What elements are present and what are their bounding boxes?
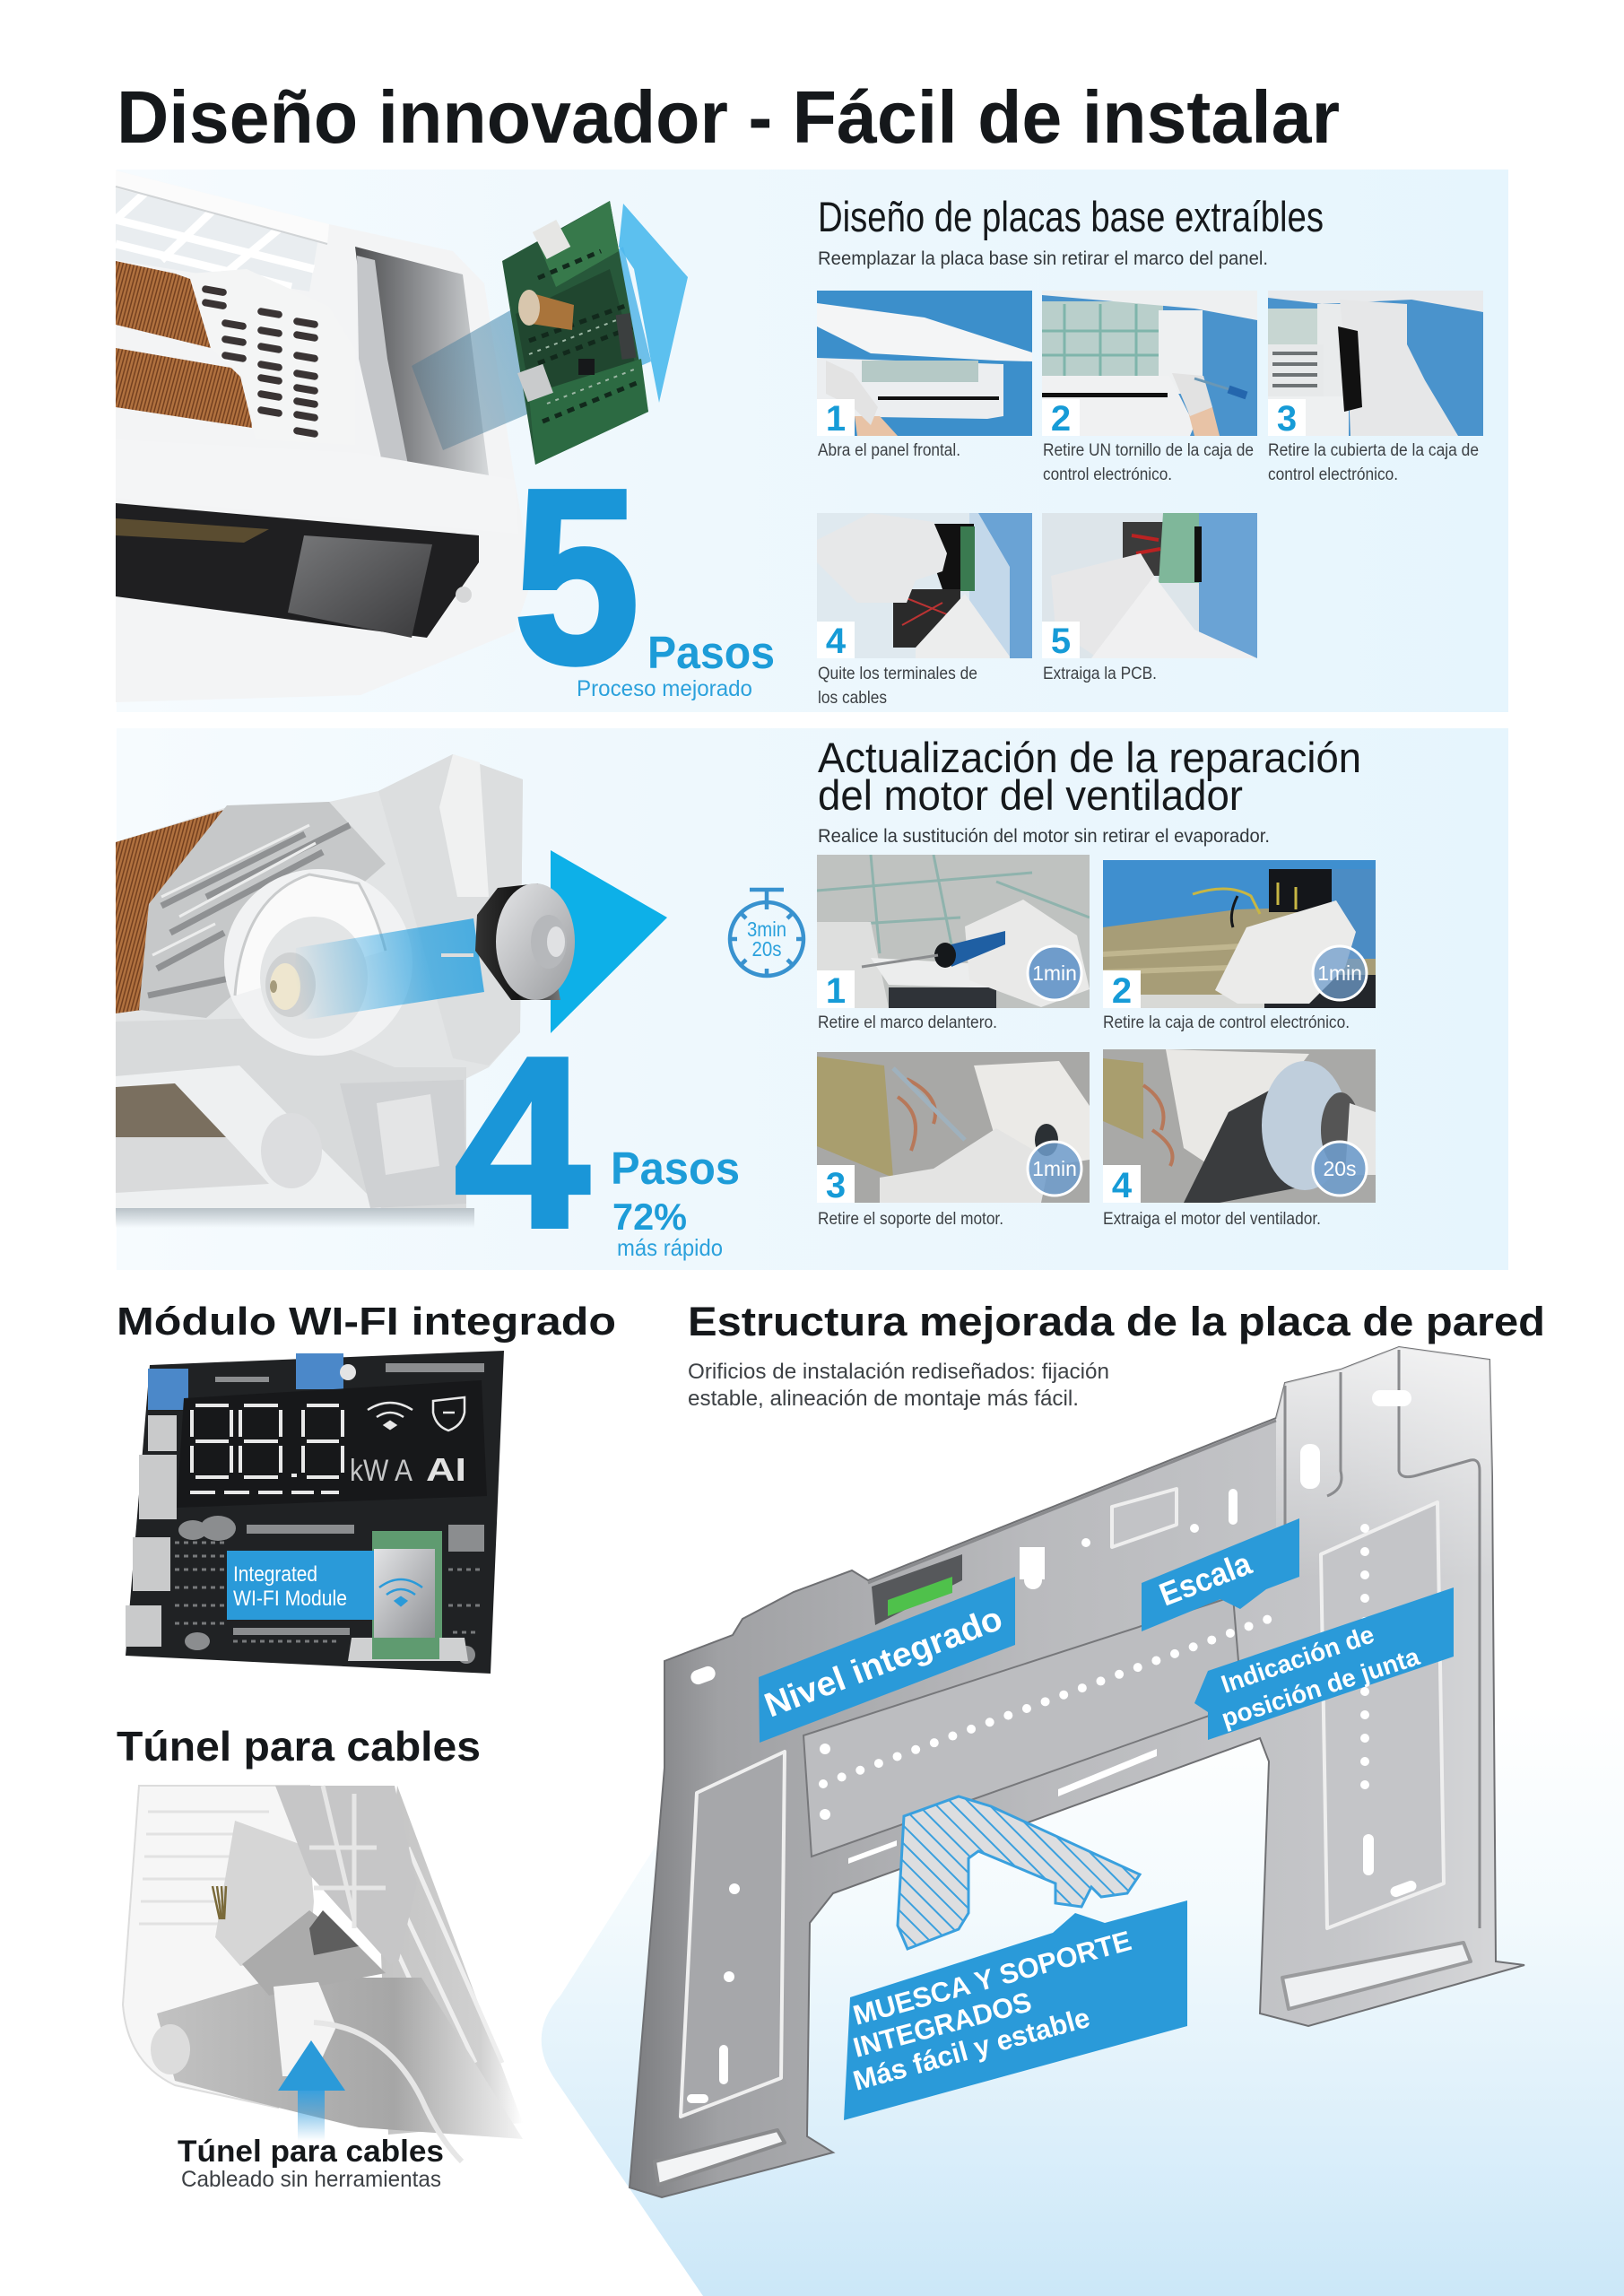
lower white band [116,439,518,534]
display units: kW A [350,1454,413,1488]
white tunnel block [274,1982,336,2076]
floor shadow [116,1208,474,1228]
copper coil [116,809,227,1013]
left recess [681,1752,785,2117]
step 4 photo [817,513,1032,661]
board traces [175,1543,484,1641]
tray inner shadow [116,1083,226,1137]
label: notch and support: INTEGRADOS [850,1986,1035,2064]
main column [275,1786,417,1964]
step 1 photo [817,291,1032,439]
pasos label: Pasos [611,1143,740,1194]
label: joint position: posición de junta [1218,1642,1423,1733]
blue connector top [296,1353,343,1389]
panel: fan motor repair [116,728,1508,1278]
left white connectors [126,1415,177,1647]
illustration: fan motor assembly [116,754,575,1228]
motor step 4 photo: 4 [1112,1166,1133,1205]
circuit board [126,1351,504,1674]
integrated notch bracket [898,1796,1140,1949]
motor step captions: Retire el marco delantero. [818,1013,997,1032]
centre duct [242,1910,386,1996]
heading: Actualización de la reparación [818,734,1361,781]
motor step 2 photo [1103,860,1376,1011]
fan shroud arc [235,874,386,996]
capacitor [518,290,574,330]
step captions: Extraiga la PCB. [1043,665,1157,683]
assembly silhouette [116,754,523,1208]
72 percent: 72% [612,1196,687,1238]
step 1 photo: 1 [826,399,846,439]
board [126,1351,504,1674]
step captions: Quite los terminales de [818,665,977,683]
module base [348,1638,468,1661]
icon: shield [433,1397,465,1431]
metal wall plate [630,1347,1524,2197]
gearbox drum [261,1113,322,1188]
motor step 2 photo: 2 [1112,971,1132,1011]
dark opening [116,503,479,638]
icon: module wifi [379,1579,422,1605]
motor step 4 photo: 20s [1323,1157,1357,1180]
lower tray [116,1065,381,1208]
section: integrated wi-fi module [117,1300,616,1674]
step 5 photo [1042,513,1257,661]
motor step captions: Retire el soporte del motor. [818,1210,1003,1229]
dark channel [309,1910,359,1955]
step 3 photo [1268,291,1483,439]
right foot slot [1282,1943,1471,2009]
step 2 photo [1042,291,1257,439]
module label: WI-FI Module [233,1587,347,1611]
screw [456,587,472,603]
illustration: unit with cable tunnel [123,1786,523,2161]
step captions: control electrónico. [1043,465,1172,484]
icon: stopwatch: 3min [747,918,786,941]
coloured wires [213,1886,226,1919]
top right fade [1276,1347,1492,1578]
step 3 photo: 3 [1277,399,1297,439]
heading: Módulo WI-FI integrado [117,1300,616,1344]
copper coil upper [116,261,211,348]
motor step 1 photo: 1 [826,971,846,1011]
caption subtitle: Cableado sin herramientas [181,2167,441,2192]
label: notch and support [844,1900,1187,2120]
inner grey box [288,535,432,638]
panel: removable PCB design [116,170,1508,715]
improved process label: Proceso mejorado [577,676,752,701]
pipes [139,802,386,1018]
motor [441,883,575,1000]
motor step 2 photo: 1min [1317,961,1362,985]
step captions [818,441,1479,708]
copper coil lower [116,348,252,428]
hole row [823,1619,1269,1784]
illustration: indoor unit with PCB [116,170,688,702]
oblong emboss [1112,1489,1177,1547]
icon: stopwatch: 20s [751,937,782,961]
translucent grey block [215,1821,314,1966]
bearing [265,952,316,1017]
arrow head [551,850,667,1033]
side wall [378,754,523,1065]
bracket shade [377,1094,439,1175]
vertical hole column [1360,1528,1369,1787]
top grille [116,170,329,291]
step captions: control electrónico. [1268,465,1398,484]
base block [116,1018,466,1208]
heading: Diseño de placas base extraíbles [818,193,1324,240]
arrow shaft [298,2091,325,2141]
caption title: Túnel para cables [178,2135,444,2169]
plate outline [630,1347,1524,2197]
section: wall plate [630,1299,1545,2197]
motor step captions: Retire la caja de control electrónico. [1103,1013,1350,1032]
right recess [1321,1502,1444,1928]
label: integrated level: Nivel integrado [760,1600,1008,1725]
arrow shaft [293,918,484,1022]
motor step captions [818,1013,1350,1229]
display ai logo: AI [426,1451,466,1488]
section: cable tunnel [117,1723,523,2192]
faster label: más rápido [617,1234,723,1261]
step captions: Abra el panel frontal. [818,441,960,460]
label: scale: Escala [1154,1544,1257,1613]
step 4 photo: 4 [826,622,847,661]
seven segment digits [190,1405,343,1492]
arrow shaft [412,247,651,450]
arrow head [278,2040,345,2091]
board components [178,1363,484,1664]
grey control box compartment [355,247,489,475]
green spirit level [888,1577,952,1616]
display [177,1380,487,1508]
white cable [314,2022,462,2161]
inner wheel [260,917,368,1039]
tray inner grey [116,1137,269,1193]
title: Diseño innovador - Fácil de instalar [117,75,1340,159]
upper ridges [868,1350,1480,1928]
translucent ghost body [123,1786,309,2108]
label: notch and support: MUESCA Y SOPORTE [850,1925,1134,2031]
gold rail [116,518,269,543]
green PCB [502,201,648,465]
column ribs [309,1786,386,1928]
icon: stopwatch [730,890,803,976]
motor step 3 photo: 3 [826,1166,846,1205]
green module [372,1531,442,1661]
step 2 photo: 2 [1051,399,1071,439]
label: joint position: Indicación de [1218,1620,1377,1699]
right body strips [395,1848,502,2063]
big number five: 5 [514,439,639,715]
center recess [803,1596,1242,1857]
subheading: Realice la sustitución del motor sin retirar el evaporador. [818,826,1270,847]
background gradient shape [542,1704,1624,2296]
heading [818,734,1361,819]
lower bracket [340,1080,466,1208]
module shield [374,1549,435,1638]
motor step 3 photo: 1min [1032,1157,1077,1180]
left foot slot [655,2130,785,2185]
unit body [116,170,530,702]
step captions: Retire UN tornillo de la caja de [1043,441,1254,460]
motor step 1 photo [817,855,1090,1011]
right body [381,1786,523,2135]
blue connector left [148,1369,188,1410]
heading: del motor del ventilador [818,771,1243,819]
holes and slots [687,1390,1418,2103]
pasos label: Pasos [647,627,775,678]
motor step 1 photo: 1min [1032,961,1077,985]
step 5 photo: 5 [1051,622,1071,661]
module label: Integrated [233,1562,317,1587]
motor step 3 photo [817,1052,1090,1205]
label: notch and support: Más fácil y estable [850,2002,1093,2097]
fan housing [224,869,413,1056]
lower base [157,1978,523,2139]
motor step 4 photo [1103,1049,1376,1205]
label: scale [1142,1518,1299,1631]
wall ribbing [439,754,489,897]
motor step captions: Extraiga el motor del ventilador. [1103,1210,1321,1229]
compartment bracket [357,256,408,465]
heading: Túnel para cables [117,1723,481,1770]
ghost grille lines [139,1812,269,1924]
description [688,1360,1109,1411]
step captions: Retire la cubierta de la caja de [1268,441,1479,460]
drum [151,2024,190,2074]
subheading: Reemplazar la placa base sin retirar el marco del panel. [818,248,1268,269]
description: estable, alineación de montaje más fácil. [688,1387,1079,1411]
big number four: 4 [455,1008,591,1278]
heading: Estructura mejorada de la placa de pared [688,1299,1545,1344]
top small capacitor [340,1364,356,1380]
description: Orificios de instalación rediseñados: fijación [688,1360,1109,1384]
white vented plate [190,269,355,445]
step captions: los cables [818,689,887,708]
panel background [117,728,1508,1270]
module label [227,1551,374,1620]
label: joint position [1194,1587,1454,1740]
icon: wifi [368,1403,413,1429]
module green strip [372,1638,439,1659]
panel background [117,170,1508,712]
arrow head [619,204,688,403]
level recess [872,1554,962,1625]
